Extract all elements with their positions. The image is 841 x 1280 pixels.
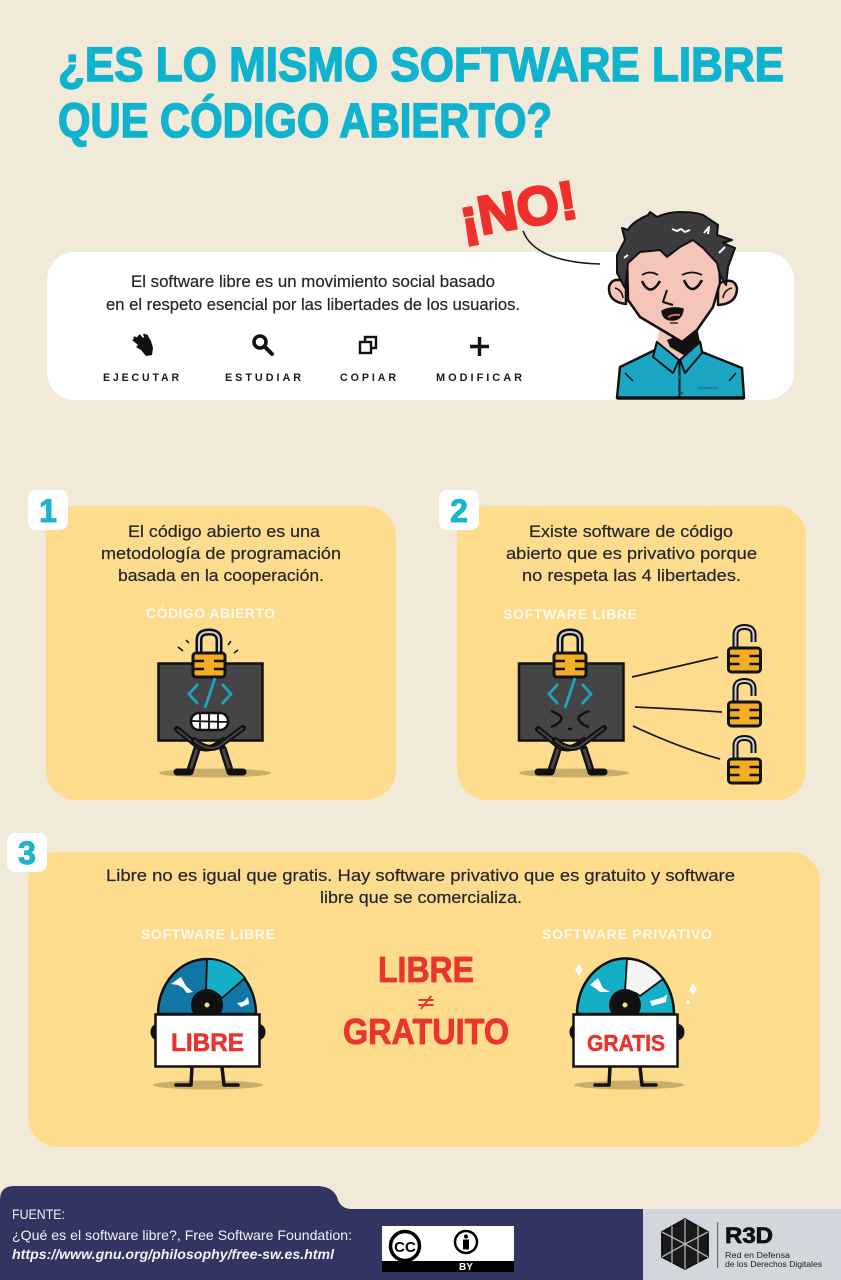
definition text bbox=[106, 272, 520, 314]
eyes bbox=[642, 280, 702, 290]
icon: r3d hexagon bbox=[662, 1219, 708, 1269]
face bbox=[627, 232, 720, 342]
freedom labels bbox=[103, 372, 525, 384]
badge 1 bbox=[28, 490, 68, 530]
r3d wordmark: Red en Defensa bbox=[725, 1251, 791, 1260]
comparison: libre distinto de gratuito: ≠ bbox=[416, 988, 436, 1016]
badge 2: 2 bbox=[450, 493, 468, 529]
label: software privativo: SOFTWARE PRIVATIVO bbox=[542, 926, 712, 942]
definition text: en el respeto esencial por las libertades de los usuarios. bbox=[106, 295, 520, 314]
source text: ¿Qué es el software libre?, Free Software Foundation: bbox=[12, 1227, 352, 1243]
illustration: disc libre: LIBRE bbox=[171, 1029, 244, 1057]
source text: https://www.gnu.org/philosophy/free-sw.es.html bbox=[12, 1246, 335, 1262]
illustration: angry monitor bbox=[158, 632, 271, 778]
ears bbox=[609, 280, 626, 304]
collar bbox=[653, 342, 702, 397]
card 2 text: Existe software de código bbox=[529, 522, 733, 541]
panel: card 3 bbox=[7, 833, 820, 1147]
r3d wordmark: R3D bbox=[725, 1223, 773, 1248]
source text: FUENTE: bbox=[12, 1206, 65, 1222]
icon: open lock middle bbox=[728, 681, 760, 726]
icon: hand bbox=[132, 334, 153, 356]
card 3 text bbox=[106, 866, 735, 907]
character: man bbox=[609, 212, 744, 398]
illustration: disc gratis: GRATIS bbox=[587, 1030, 665, 1056]
badge 3 bbox=[7, 833, 47, 872]
icon: magnifier bbox=[254, 336, 272, 354]
footer: source band bbox=[0, 1186, 643, 1280]
freedom labels: MODIFICAR bbox=[436, 372, 525, 384]
icon: copy bbox=[360, 337, 376, 353]
card 3 text: libre que se comercializa. bbox=[320, 888, 522, 907]
badge 2 bbox=[439, 490, 479, 530]
title: QUE CÓDIGO ABIERTO? bbox=[58, 93, 552, 148]
title: ¿ES LO MISMO SOFTWARE LIBRE bbox=[58, 39, 784, 92]
card 2 text: abierto que es privativo porque bbox=[506, 544, 757, 563]
panel: card 1 bbox=[28, 490, 396, 800]
title bbox=[58, 39, 784, 148]
card 2 text: no respeta las 4 libertades. bbox=[522, 566, 741, 585]
icon: open lock bottom bbox=[728, 738, 760, 783]
mouth bbox=[662, 308, 683, 320]
definition text: El software libre es un movimiento social basado bbox=[131, 272, 495, 291]
mouth: teeth bbox=[191, 713, 228, 730]
label: software libre: SOFTWARE LIBRE bbox=[141, 926, 275, 942]
license badge: cc by bbox=[382, 1226, 514, 1273]
label: codigo abierto: CÓDIGO ABIERTO bbox=[146, 604, 275, 621]
badge 3: 3 bbox=[18, 835, 36, 871]
card 1 text: metodología de programación bbox=[101, 544, 341, 563]
card 2 text bbox=[506, 522, 757, 585]
connector lines bbox=[632, 657, 722, 759]
panel: card 2 bbox=[439, 490, 806, 800]
card 1 text bbox=[101, 522, 341, 585]
badge 1: 1 bbox=[39, 493, 57, 529]
exclamation: no: ¡NO! bbox=[455, 170, 582, 250]
shirt bbox=[617, 342, 744, 398]
card 1 text: El código abierto es una bbox=[128, 522, 321, 541]
footer: r3d logo block bbox=[643, 1209, 841, 1280]
license badge: cc by: CC bbox=[394, 1239, 416, 1256]
freedom labels: ESTUDIAR bbox=[225, 372, 304, 384]
illustration: disc libre bbox=[150, 959, 266, 1090]
r3d wordmark: de los Derechos Digitales bbox=[725, 1260, 822, 1269]
license badge: cc by: BY bbox=[459, 1262, 473, 1273]
hair bbox=[617, 212, 735, 288]
illustration: disc gratis bbox=[570, 958, 697, 1090]
freedom labels: EJECUTAR bbox=[103, 372, 182, 384]
label: software libre: SOFTWARE LIBRE bbox=[503, 606, 637, 622]
comparison: libre distinto de gratuito: GRATUITO bbox=[343, 1011, 509, 1052]
icon: open lock top bbox=[728, 627, 760, 672]
source text bbox=[12, 1206, 352, 1262]
speech line bbox=[523, 231, 600, 264]
freedom labels: COPIAR bbox=[340, 372, 399, 384]
r3d wordmark bbox=[725, 1223, 822, 1269]
comparison: libre distinto de gratuito bbox=[343, 949, 509, 1052]
card 3 text: Libre no es igual que gratis. Hay software privativo que es gratuito y software bbox=[106, 866, 735, 885]
comparison: libre distinto de gratuito: LIBRE bbox=[378, 949, 474, 990]
illustration: sad monitor bbox=[519, 632, 629, 778]
neck bbox=[657, 325, 700, 360]
panel: definition bbox=[47, 252, 794, 400]
card 1 text: basada en la cooperación. bbox=[118, 566, 324, 585]
icon: plus bbox=[470, 337, 489, 356]
